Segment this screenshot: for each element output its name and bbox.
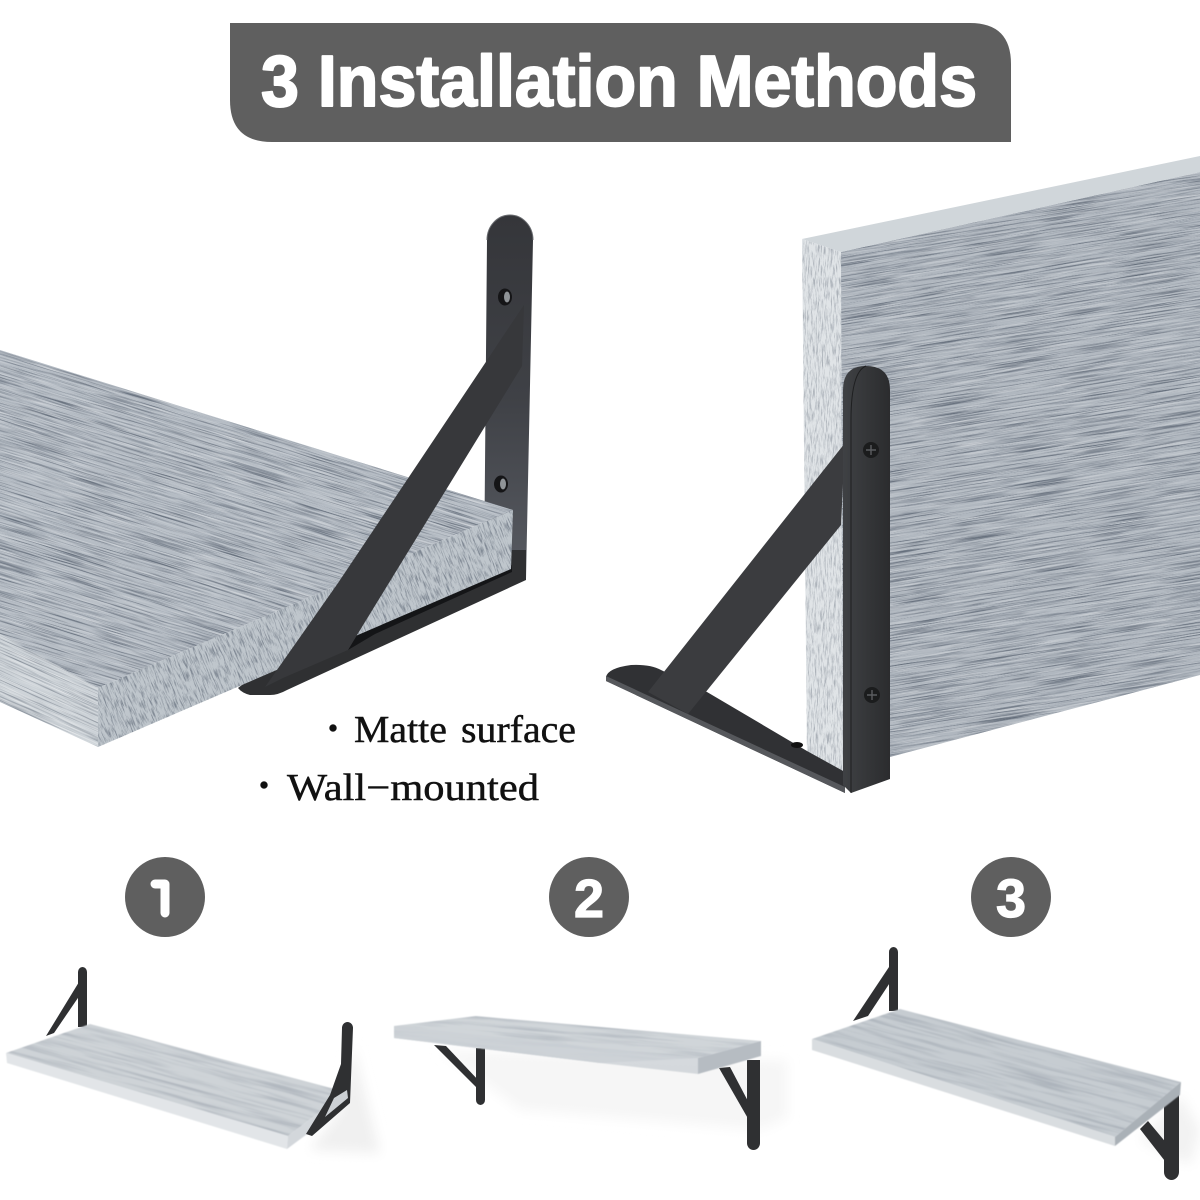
bracket foot [238, 550, 526, 695]
screw [864, 687, 880, 703]
left bracket [434, 1045, 485, 1105]
feature: matte surface: Matte surface [354, 709, 576, 751]
rear bracket [46, 967, 87, 1036]
thumbnail 3: shelf with mixed brackets [812, 947, 1196, 1180]
shelf side edge [802, 239, 843, 771]
step badge 3: 3 [996, 869, 1026, 929]
step badge 3 [971, 857, 1051, 937]
thumbnail 2: shelf with brackets downward [394, 1016, 779, 1150]
step badge 1 [125, 857, 205, 937]
left shelf close-up with bracket [0, 214, 534, 747]
title banner [230, 23, 1011, 142]
front bracket [306, 1022, 353, 1136]
bracket wall plate [484, 215, 533, 579]
shelf [812, 1008, 1182, 1146]
shelf front face [841, 172, 1200, 770]
bracket wall plate [843, 366, 890, 793]
thumbnail 1: shelf with brackets upward [6, 967, 376, 1152]
feature list [260, 709, 576, 809]
shelf top surface [0, 350, 513, 688]
bracket diagonal brace [265, 305, 524, 687]
shelf end face [98, 510, 513, 747]
shelf front face [0, 634, 98, 747]
shelf top lip [802, 156, 1200, 252]
shelf [6, 1024, 332, 1149]
step badge 2: 2 [574, 869, 604, 929]
right shelf close-up with bracket [606, 156, 1200, 793]
feature: wall-mounted: Wall−mounted [287, 767, 539, 809]
upper bracket [853, 947, 898, 1021]
right bracket [719, 1060, 760, 1150]
shelf [394, 1016, 762, 1074]
lower bracket [1140, 1095, 1179, 1180]
bracket foot [606, 665, 845, 793]
bracket diagonal brace [648, 443, 845, 714]
step badge 2 [549, 857, 629, 937]
title banner: 3 Installation Methods [261, 42, 977, 122]
screw [863, 442, 879, 458]
